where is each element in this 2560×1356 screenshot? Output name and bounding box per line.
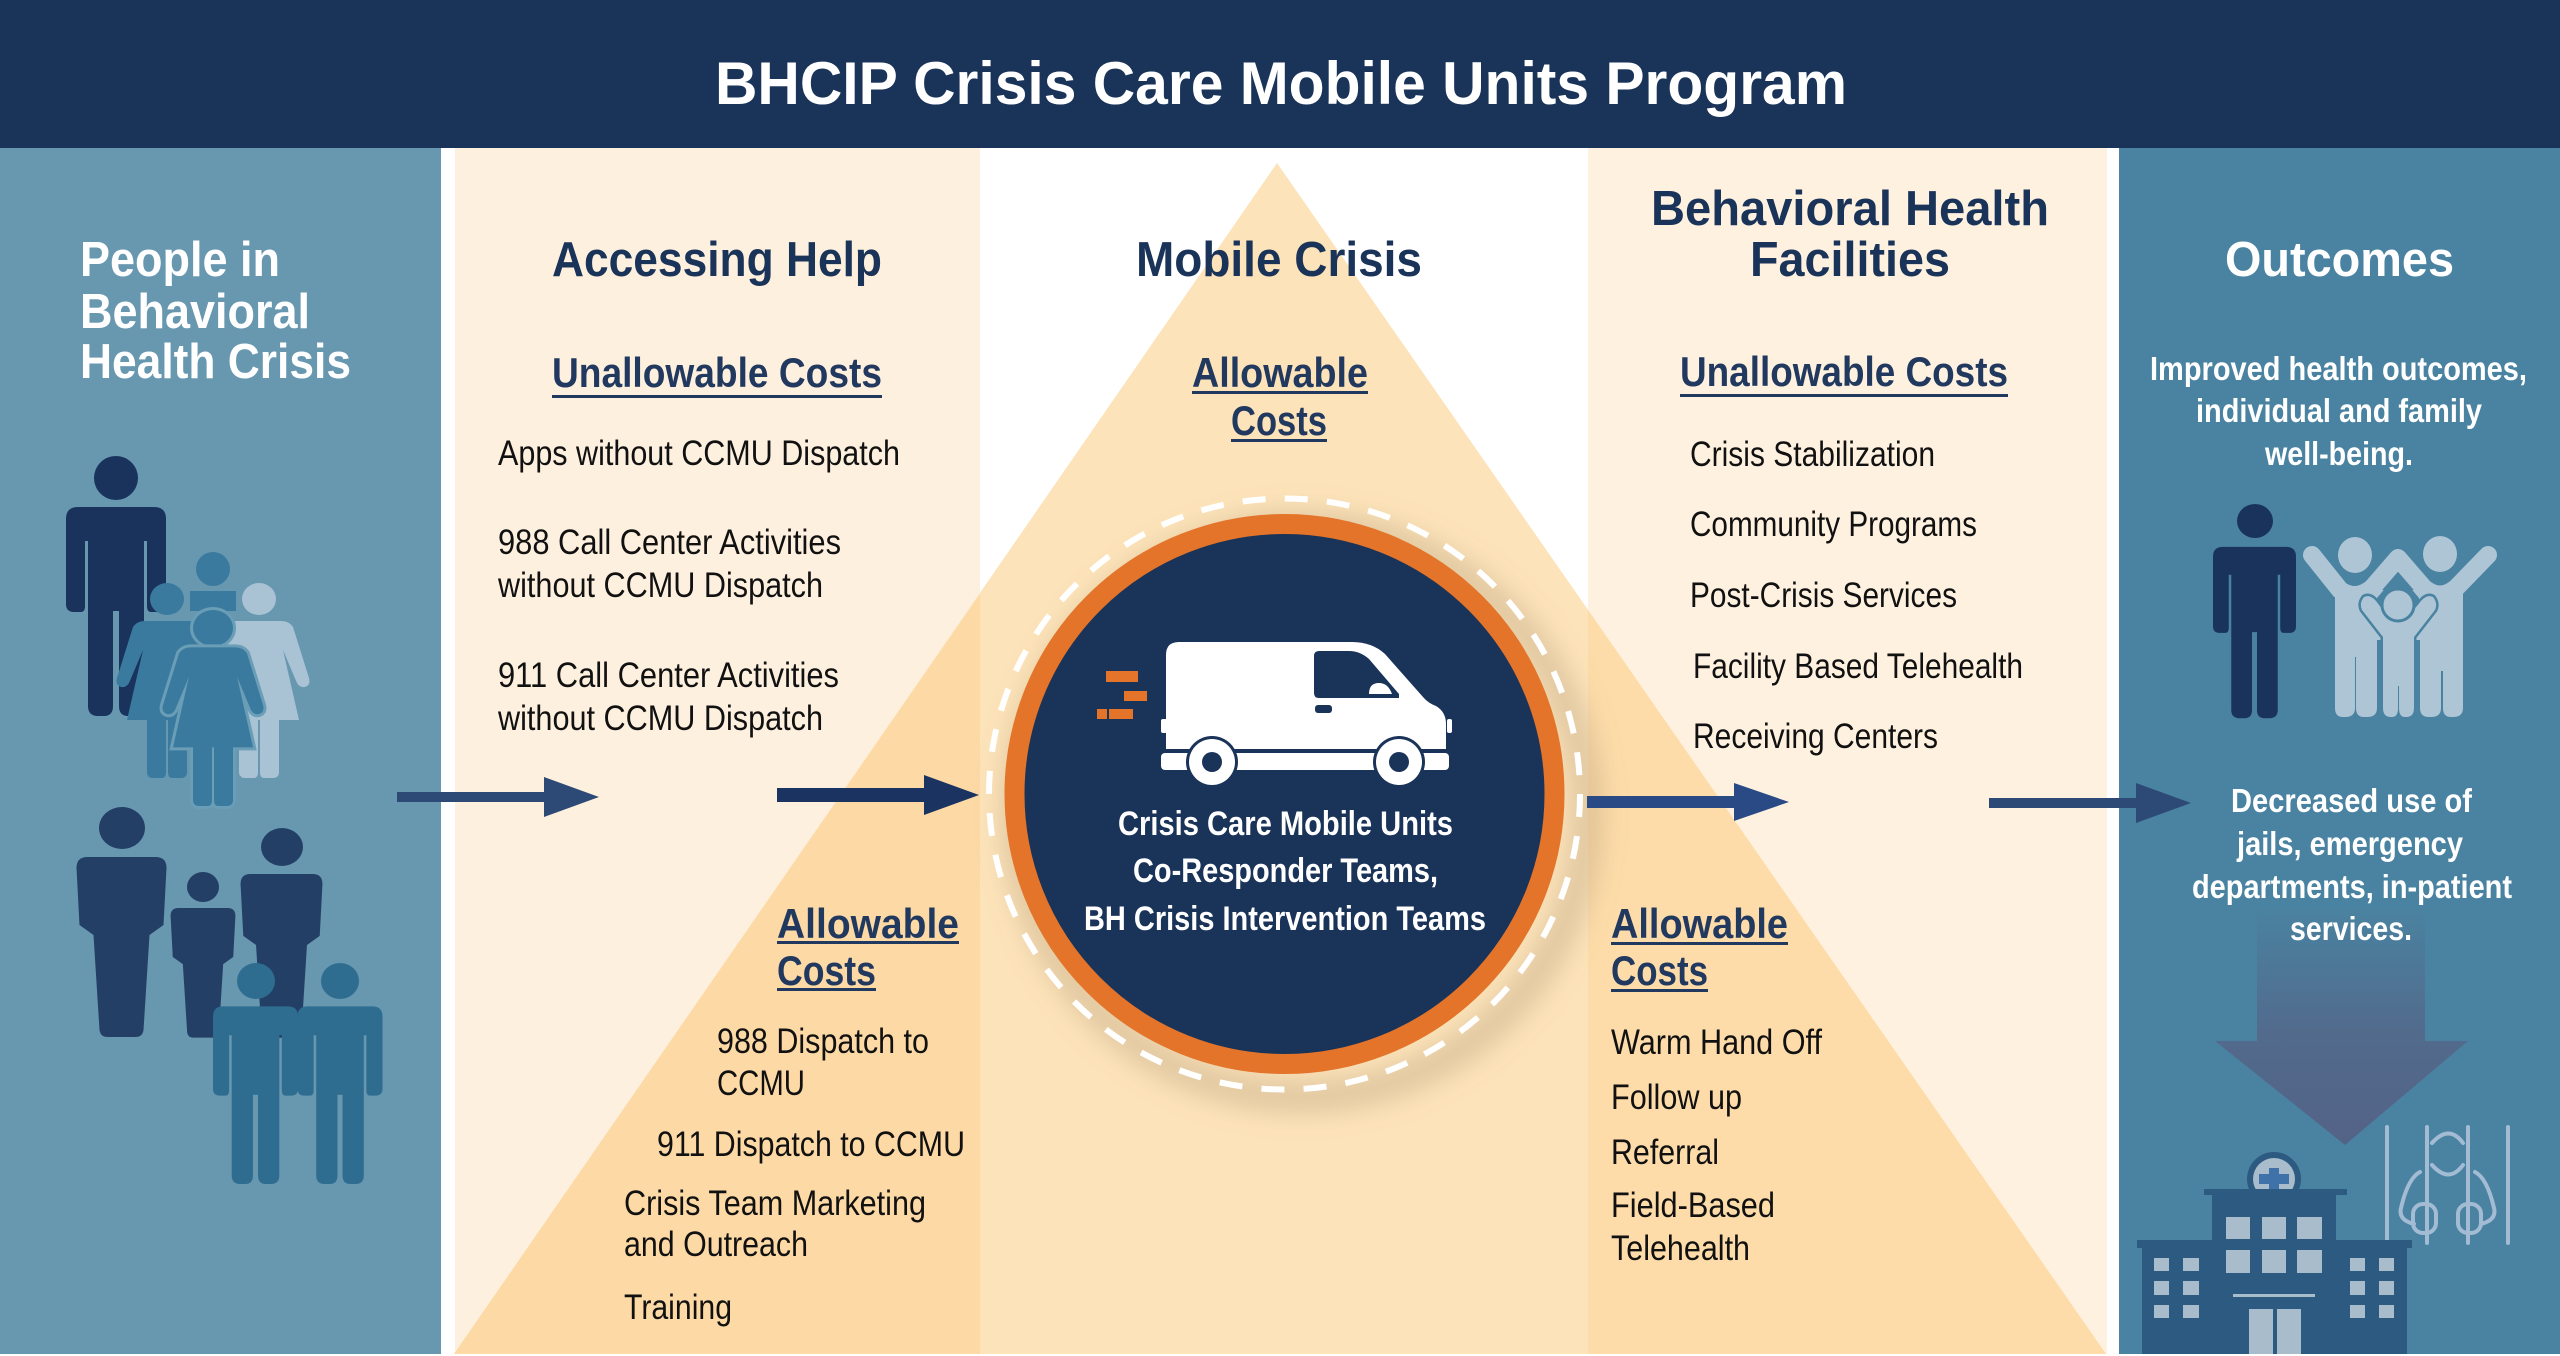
list: allowable access costs: 988 Dispatch to xyxy=(717,1022,929,1061)
pyramid triangle xyxy=(454,163,2106,1354)
panel: central columns background xyxy=(455,148,2107,1354)
list: allowable access costs: Crisis Team Marketing xyxy=(624,1184,926,1223)
icon: van xyxy=(1161,642,1452,788)
subheading: allowable costs: Allowable xyxy=(1611,900,1788,947)
text: decreased use: services. xyxy=(2290,910,2412,947)
heading: behavioral health facilities: Behavioral Health xyxy=(1651,182,2049,236)
list: unallowable access costs: 911 Call Center Activities xyxy=(498,656,839,695)
arrow: people to access xyxy=(397,777,599,817)
icon: group of adults and women xyxy=(66,456,310,806)
list: allowable facility costs: Warm Hand Off xyxy=(1611,1023,1822,1062)
subheading: allowable costs xyxy=(777,900,959,994)
list: allowable facility costs xyxy=(1611,1023,1822,1268)
list: allowable facility costs: Referral xyxy=(1611,1133,1719,1172)
list: unallowable facility costs: Community Programs xyxy=(1690,505,1977,544)
icon: person xyxy=(2213,504,2296,718)
header banner xyxy=(0,0,2560,148)
heading: accessing help: Accessing Help xyxy=(552,233,882,287)
list: unallowable facility costs xyxy=(1690,435,2023,756)
panel: people in behavioral health crisis xyxy=(0,148,441,1354)
heading: behavioral health facilities xyxy=(1651,182,2049,287)
subheading: allowable costs: Allowable xyxy=(777,900,959,947)
subheading: allowable costs xyxy=(1611,900,1788,994)
subheading: allowable costs: Allowable xyxy=(1192,349,1368,396)
list: unallowable access costs: without CCMU Dispatch xyxy=(497,566,823,605)
list: unallowable facility costs: Crisis Stabilization xyxy=(1690,435,1935,474)
subheading: unallowable costs: Unallowable Costs xyxy=(1680,348,2008,395)
circle label xyxy=(1084,805,1486,938)
heading: outcomes: Outcomes xyxy=(2225,233,2454,287)
icon: group of men and children xyxy=(76,807,382,1184)
text: decreased use xyxy=(2192,782,2512,947)
list: unallowable access costs xyxy=(497,434,900,738)
list: unallowable access costs: without CCMU Dispatch xyxy=(497,699,823,738)
icon: family xyxy=(2312,536,2488,717)
circle label: Co-Responder Teams, xyxy=(1133,852,1438,890)
subheading: allowable costs: Costs xyxy=(1611,947,1708,994)
list: allowable access costs xyxy=(624,1022,965,1327)
list: unallowable access costs: Apps without CCMU Dispatch xyxy=(498,434,900,473)
heading: behavioral health facilities: Facilities xyxy=(1750,233,1950,287)
list: allowable facility costs: Follow up xyxy=(1611,1078,1742,1117)
arrow: facilities to outcomes xyxy=(1989,783,2191,823)
list: unallowable facility costs: Post-Crisis Services xyxy=(1690,576,1957,615)
icon: speed lines xyxy=(1097,671,1147,719)
list: allowable access costs: and Outreach xyxy=(624,1225,808,1264)
circle: crisis care mobile units xyxy=(989,498,1587,1097)
heading: people in crisis: People in xyxy=(80,233,280,287)
subheading: unallowable costs: Unallowable Costs xyxy=(552,349,882,396)
text: improved outcomes xyxy=(2150,350,2527,472)
subheading: allowable costs: Costs xyxy=(777,947,876,994)
heading: people in crisis: Behavioral xyxy=(80,285,310,339)
circle label: BH Crisis Intervention Teams xyxy=(1084,900,1486,938)
list: allowable access costs: CCMU xyxy=(717,1064,805,1103)
text: improved outcomes: well-being. xyxy=(2264,435,2413,472)
list: allowable access costs: 911 Dispatch to CCMU xyxy=(657,1125,965,1164)
heading: people in crisis: Health Crisis xyxy=(80,335,351,389)
text: improved outcomes: individual and family xyxy=(2196,392,2483,429)
list: allowable facility costs: Telehealth xyxy=(1611,1229,1750,1268)
subheading: allowable costs: Costs xyxy=(1231,397,1327,444)
panel: mobile crisis xyxy=(989,233,1587,1097)
text: decreased use: jails, emergency xyxy=(2236,825,2464,862)
icon: jail cell xyxy=(2387,1127,2508,1243)
heading: people in crisis xyxy=(80,233,351,389)
big downward arrow xyxy=(2215,905,2468,1145)
arrow: access to mobile crisis xyxy=(777,775,979,815)
list: allowable access costs: Training xyxy=(624,1288,732,1327)
list: allowable facility costs: Field-Based xyxy=(1611,1186,1775,1225)
circle label: Crisis Care Mobile Units xyxy=(1118,805,1453,843)
list: unallowable access costs: 988 Call Center Activities xyxy=(498,523,841,562)
list: unallowable facility costs: Facility Based Telehealth xyxy=(1693,647,2023,686)
icon: hospital xyxy=(2137,1152,2412,1354)
arrow: mobile crisis to facilities xyxy=(1587,783,1789,821)
list: unallowable facility costs: Receiving Centers xyxy=(1693,717,1938,756)
text: decreased use: departments, in-patient xyxy=(2192,868,2512,905)
heading: mobile crisis: Mobile Crisis xyxy=(1136,233,1422,287)
title: BHCIP Crisis Care Mobile Units Program xyxy=(715,50,1847,117)
text: decreased use: Decreased use of xyxy=(2231,782,2473,819)
panel: behavioral health facilities xyxy=(1611,182,2049,1268)
subheading: allowable costs xyxy=(1192,349,1368,444)
panel: accessing help xyxy=(497,233,965,1327)
panel: outcomes xyxy=(2119,148,2560,1354)
